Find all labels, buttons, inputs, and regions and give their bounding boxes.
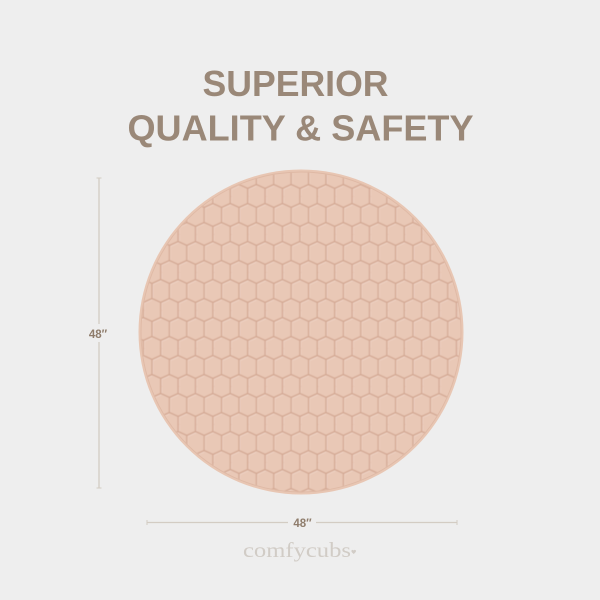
height dimension line: 48″ [89,329,108,341]
title [128,63,473,148]
width dimension line [147,514,457,530]
title: SUPERIOR [202,63,388,104]
title: QUALITY & SAFETY [128,108,473,148]
height dimension line [84,178,114,488]
round quilted play mat [138,170,464,494]
width dimension line: 48″ [293,518,312,530]
brand logo: comfycubs [243,538,351,562]
